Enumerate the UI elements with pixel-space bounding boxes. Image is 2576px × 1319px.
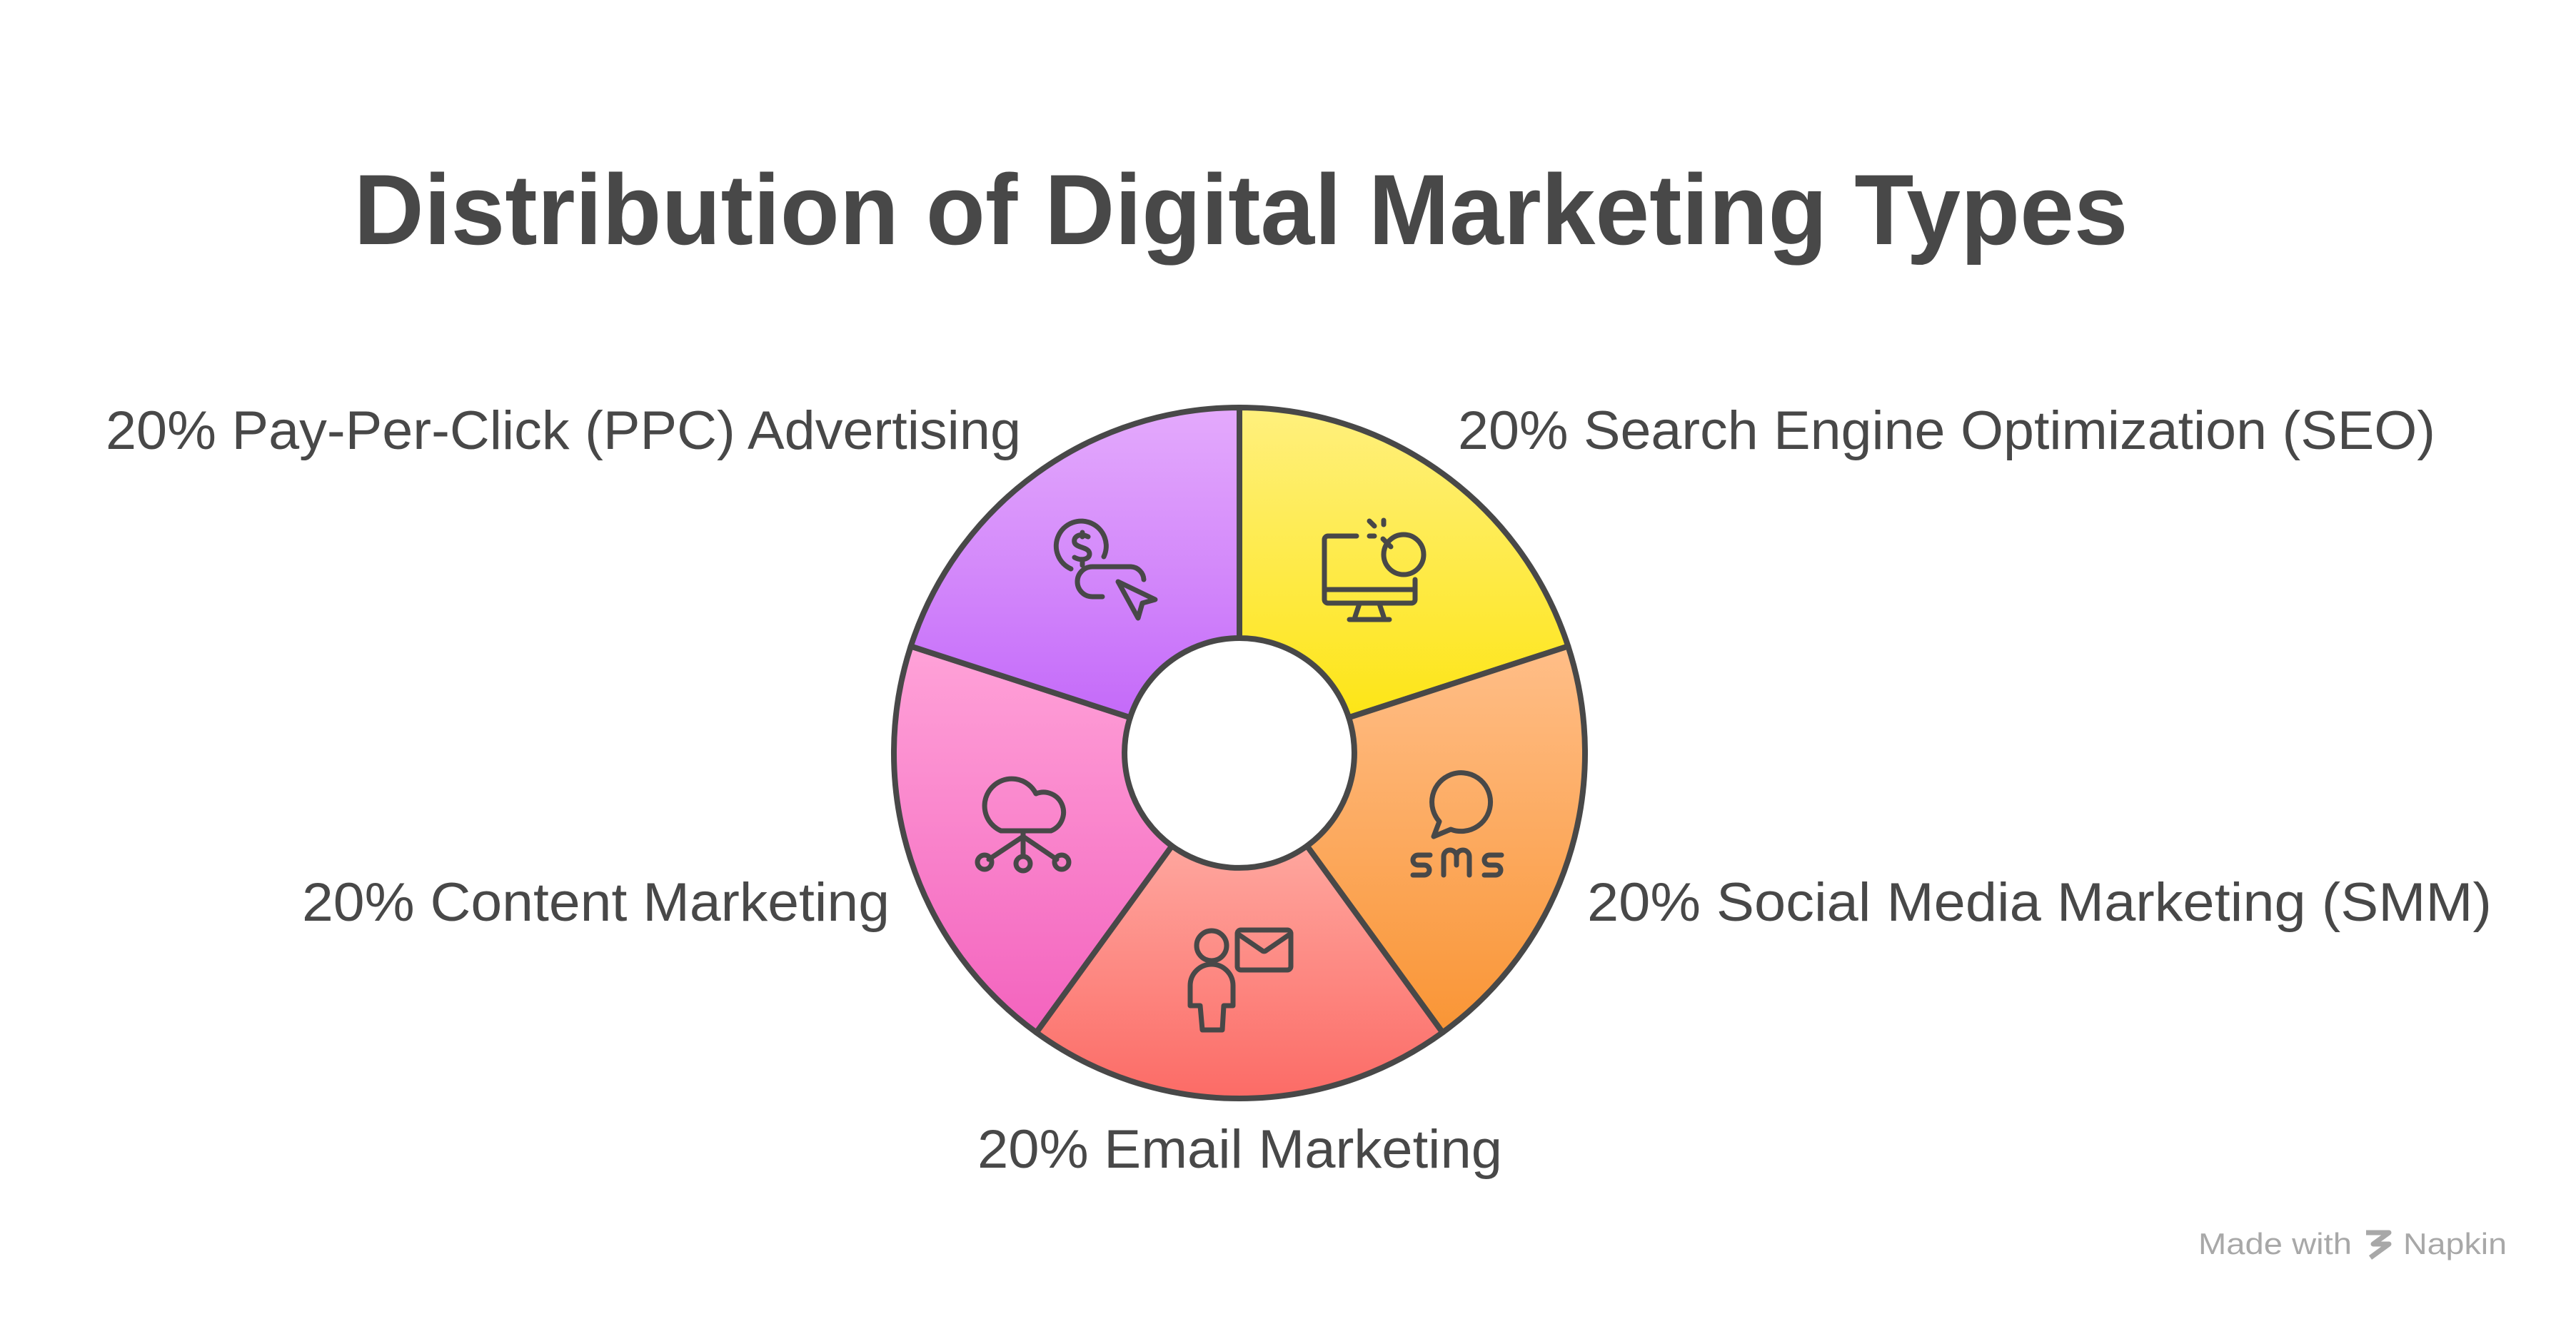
segment: SEO [1239,408,1568,717]
watermark: Made with Napkin: Made with [2198,1227,2352,1260]
title: Distribution of Digital Marketing Types [354,153,2128,266]
icon: PPC dollar and cursor [1056,521,1155,618]
label: PPC: 20% Pay-Per-Click (PPC) Advertising [106,400,1021,461]
icon: email person with envelope [1190,930,1291,1030]
icon: SEO monitor with magnifier [1324,520,1424,620]
label: Email: 20% Email Marketing [977,1119,1502,1180]
donut chart [894,408,1585,1098]
watermark: Made with Napkin [2198,1227,2507,1260]
icon: SMS bubble [1413,773,1501,875]
watermark: Made with Napkin: Napkin [2403,1227,2507,1260]
segment: Content [894,646,1172,1033]
label: SEO: 20% Search Engine Optimization (SEO) [1458,400,2435,461]
icon: content cloud network [977,779,1069,871]
segment: Email [1037,846,1442,1098]
segment: SMM [1307,646,1585,1033]
segment: PPC [911,408,1239,717]
label: Content: 20% Content Marketing [302,872,890,933]
label: SMM: 20% Social Media Marketing (SMM) [1587,872,2492,933]
